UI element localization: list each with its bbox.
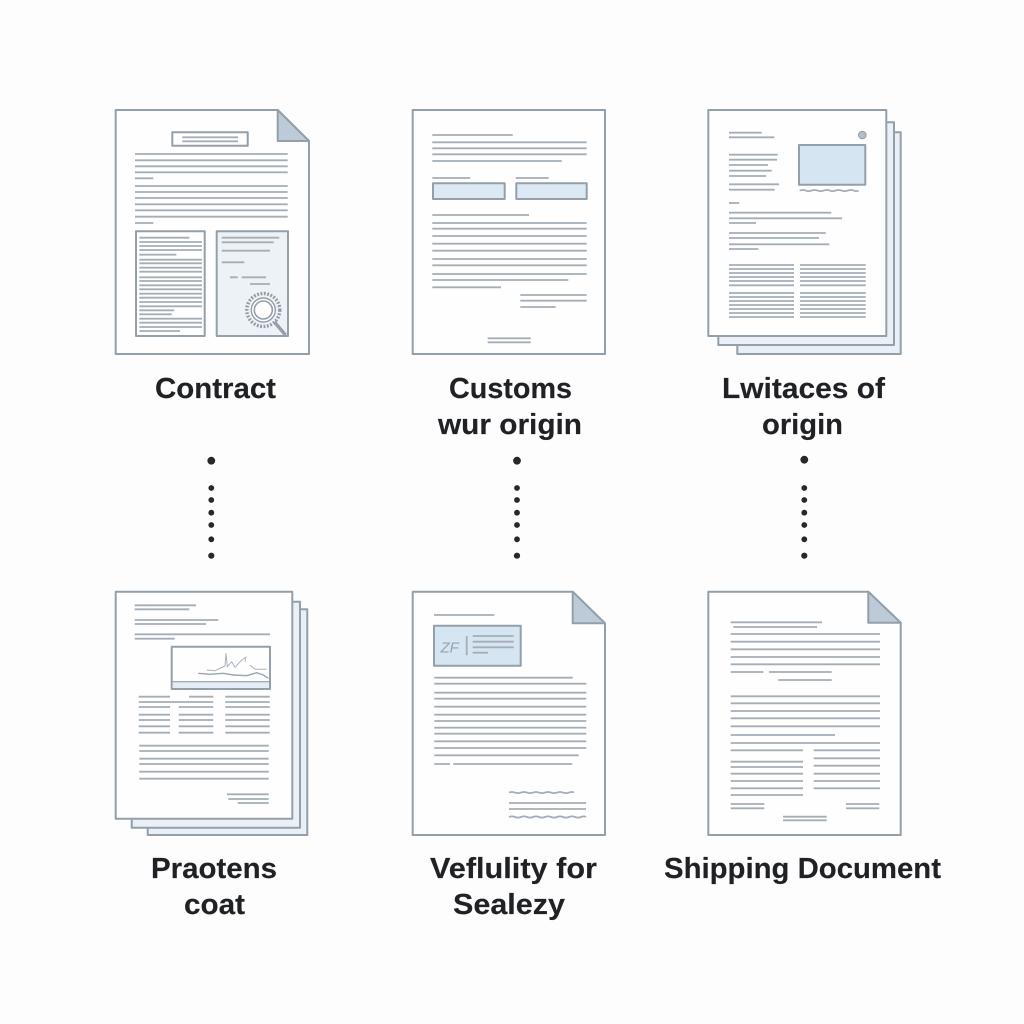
label: Contract: Contract (155, 373, 277, 405)
label: Veflulity for Sealezy (430, 853, 597, 921)
front sheet (116, 592, 292, 819)
icon: seal (247, 294, 286, 335)
middle sheet (132, 602, 300, 828)
text lines (729, 133, 842, 249)
title box (172, 132, 248, 146)
body text lines (135, 154, 288, 223)
label: Lwitaces of origin: Lwitaces of (722, 373, 886, 405)
corner fold (573, 592, 605, 623)
label: Praotens coat (151, 853, 277, 921)
label: Shipping Document: Shipping Document (664, 853, 942, 885)
label: Veflulity for Sealezy: Sealezy (453, 889, 565, 921)
panel: stacked certificate (708, 110, 901, 354)
label: Lwitaces of origin (722, 373, 886, 441)
back sheet (737, 132, 901, 354)
dotted connector: column 2 (513, 457, 521, 559)
body text lines (434, 678, 586, 764)
chart (172, 647, 270, 689)
label: Customs wur origin: Customs (449, 373, 572, 405)
label: Customs wur origin (437, 373, 582, 441)
header line (434, 614, 494, 616)
text lines (731, 622, 880, 820)
image block (799, 145, 865, 185)
text lines (135, 605, 270, 639)
icon: small stamp (858, 131, 866, 139)
front sheet (708, 110, 886, 336)
document page with folded corner (116, 110, 309, 354)
paragraph lines (139, 746, 269, 803)
panel: stacked report (116, 592, 307, 835)
middle sheet (718, 122, 894, 345)
text lines (432, 135, 587, 342)
signature lines (509, 792, 586, 818)
panel: shipping document (708, 592, 901, 835)
certificate box with seal (217, 231, 288, 336)
document page (413, 110, 605, 354)
logo box: ZF (440, 640, 460, 656)
document page with folded corner (413, 592, 605, 835)
panel: customs form (413, 110, 605, 354)
corner fold (868, 592, 901, 623)
dotted connector: column 3 (800, 456, 808, 559)
label: Lwitaces of origin: origin (762, 409, 843, 441)
dotted connector: column 1 (207, 457, 215, 559)
field boxes (433, 183, 587, 199)
left text column (136, 231, 205, 336)
label: Customs wur origin: wur origin (437, 409, 582, 441)
panel: contract (116, 110, 309, 354)
corner fold (278, 110, 309, 141)
table lines (139, 697, 270, 733)
document page with folded corner (708, 592, 901, 835)
logo box (434, 626, 521, 666)
back sheet (148, 609, 307, 835)
panel: form with logo (413, 592, 605, 835)
label: Praotens coat: coat (184, 889, 246, 921)
image caption (800, 190, 859, 191)
label: Praotens coat: Praotens (151, 853, 277, 885)
label: Veflulity for Sealezy: Veflulity for (430, 853, 597, 885)
table lines (729, 265, 866, 317)
